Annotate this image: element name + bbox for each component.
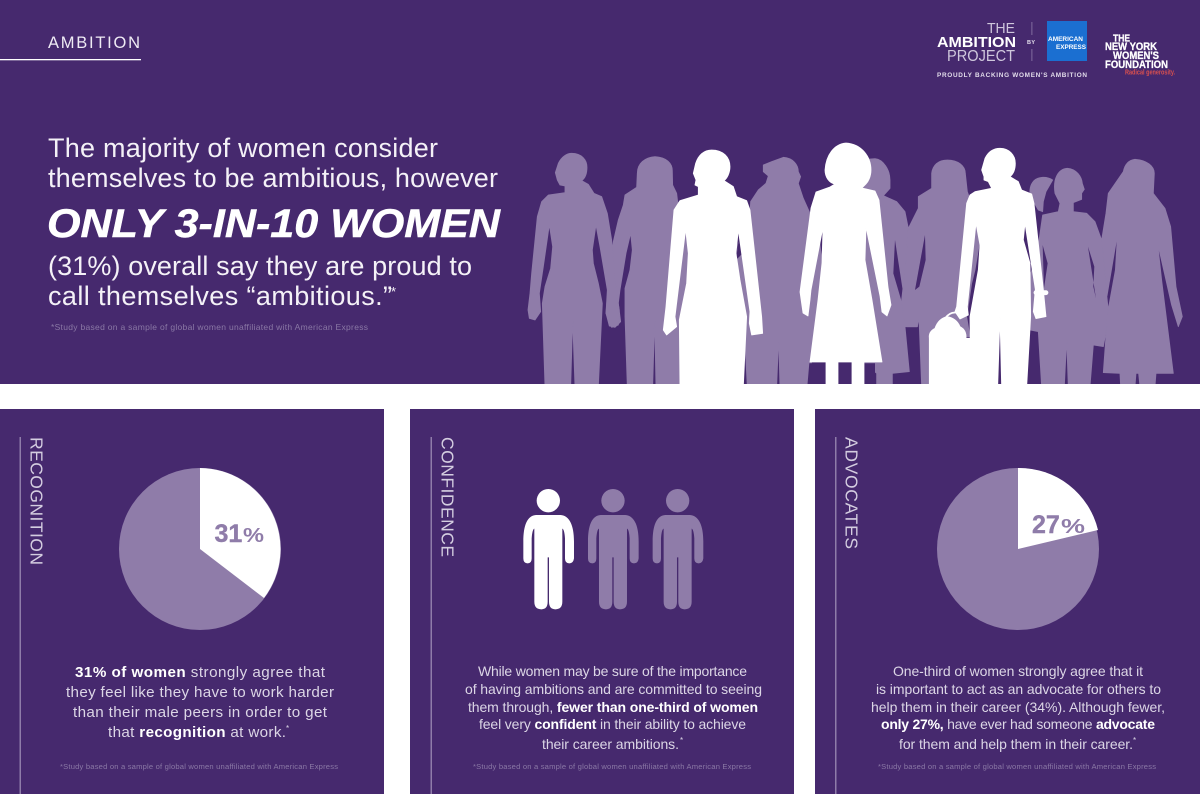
text: confidence description: [465, 663, 762, 752]
footnote: advocates: *Study based on a sample of global women unaffiliated with American Express: [878, 762, 1156, 771]
headline text: themselves to be ambitious, however: [48, 163, 498, 193]
panel: confidence: [410, 409, 794, 794]
pie chart: 27%: %: [1061, 516, 1085, 538]
text: confidence description: *: [680, 736, 683, 745]
headline text: call themselves “ambitious.”: [48, 281, 392, 311]
logo: new york women's foundation: NEW YORK: [1105, 41, 1157, 53]
headline text: ONLY 3-IN-10 WOMEN: [47, 202, 501, 246]
logo: new york women's foundation: WOMEN'S: [1113, 50, 1159, 62]
text: advocates description: One-third of women strongly agree that it: [893, 663, 1143, 679]
heading: confidence: CONFIDENCE: [438, 437, 458, 557]
logo: new york women's foundation: Radical generosity.: [1125, 70, 1175, 76]
icon: muted person: [653, 489, 703, 609]
text: confidence description: their career ambitions.: [542, 736, 679, 752]
logo: new york women's foundation: THE: [1113, 32, 1130, 44]
icon: three people, one highlighted: [523, 489, 703, 609]
pie chart: 31%: [119, 468, 281, 630]
panel: recognition: [0, 409, 384, 794]
text: advocates description: *: [1133, 736, 1136, 745]
logo: new york women's foundation: [1105, 32, 1175, 76]
section tag: ambition: AMBITION: [48, 34, 140, 52]
text: recognition description: that recognition at work.: [108, 724, 286, 741]
pie chart: 31%: 31: [214, 520, 242, 548]
logo: american express: [1047, 21, 1087, 61]
text: recognition description: [66, 664, 334, 741]
pie chart: 31%: %: [243, 525, 264, 547]
logo: the ambition project: THE: [987, 21, 1015, 37]
text: advocates description: [871, 663, 1165, 752]
text: advocates description: for them and help them in their career.: [899, 736, 1133, 752]
footnote: banner: *Study based on a sample of global women unaffiliated with American Express: [51, 322, 368, 332]
text: advocates description: only 27%, have ever had someone advocate: [881, 716, 1155, 732]
text: confidence description: While women may be sure of the importance: [478, 663, 747, 679]
text: recognition description: *: [286, 724, 289, 733]
text: recognition description: they feel like they have to work harder: [66, 684, 334, 701]
text: confidence description: them through, fewer than one-third of women: [468, 699, 758, 715]
footnote: confidence: *Study based on a sample of global women unaffiliated with American Express: [473, 762, 751, 771]
icon: highlighted person: [523, 489, 574, 609]
logo: the ambition project: [937, 21, 1087, 79]
logo: the ambition project: BY: [1027, 40, 1035, 46]
logo: new york women's foundation: FOUNDATION: [1105, 59, 1168, 71]
pie chart: 27%: [937, 468, 1099, 630]
headline text: [47, 133, 501, 311]
logo: american express: EXPRESS: [1056, 44, 1087, 51]
text: confidence description: of having ambitions and are committed to seeing: [465, 681, 762, 697]
text: advocates description: is important to act as an advocate for others to: [876, 681, 1161, 697]
logo: the ambition project: PROJECT: [947, 48, 1015, 65]
heading: advocates: ADVOCATES: [842, 437, 862, 549]
headline text: (31%) overall say they are proud to: [48, 251, 472, 281]
text: recognition description: 31% of women strongly agree that: [75, 664, 326, 681]
headline text: *: [391, 284, 396, 299]
text: confidence description: feel very confident in their ability to achieve: [479, 716, 746, 732]
pie chart: 27%: 27: [1032, 511, 1060, 539]
heading: recognition: RECOGNITION: [26, 437, 46, 565]
panel: advocates: [815, 409, 1200, 794]
illustration: group of women silhouettes: [528, 143, 1182, 390]
headline text: The majority of women consider: [48, 133, 438, 163]
panel: top banner: [0, 0, 1200, 384]
icon: muted person: [588, 489, 639, 609]
footnote: recognition: *Study based on a sample of global women unaffiliated with American Express: [60, 762, 338, 771]
text: advocates description: help them in their career (34%). Although fewer,: [871, 699, 1165, 715]
text: recognition description: than their male peers in order to get: [73, 704, 328, 721]
logo: the ambition project: AMBITION: [937, 34, 1016, 51]
logo: american express: AMERICAN: [1048, 36, 1083, 43]
logo: the ambition project: PROUDLY BACKING WOMEN'S AMBITION: [937, 72, 1087, 79]
